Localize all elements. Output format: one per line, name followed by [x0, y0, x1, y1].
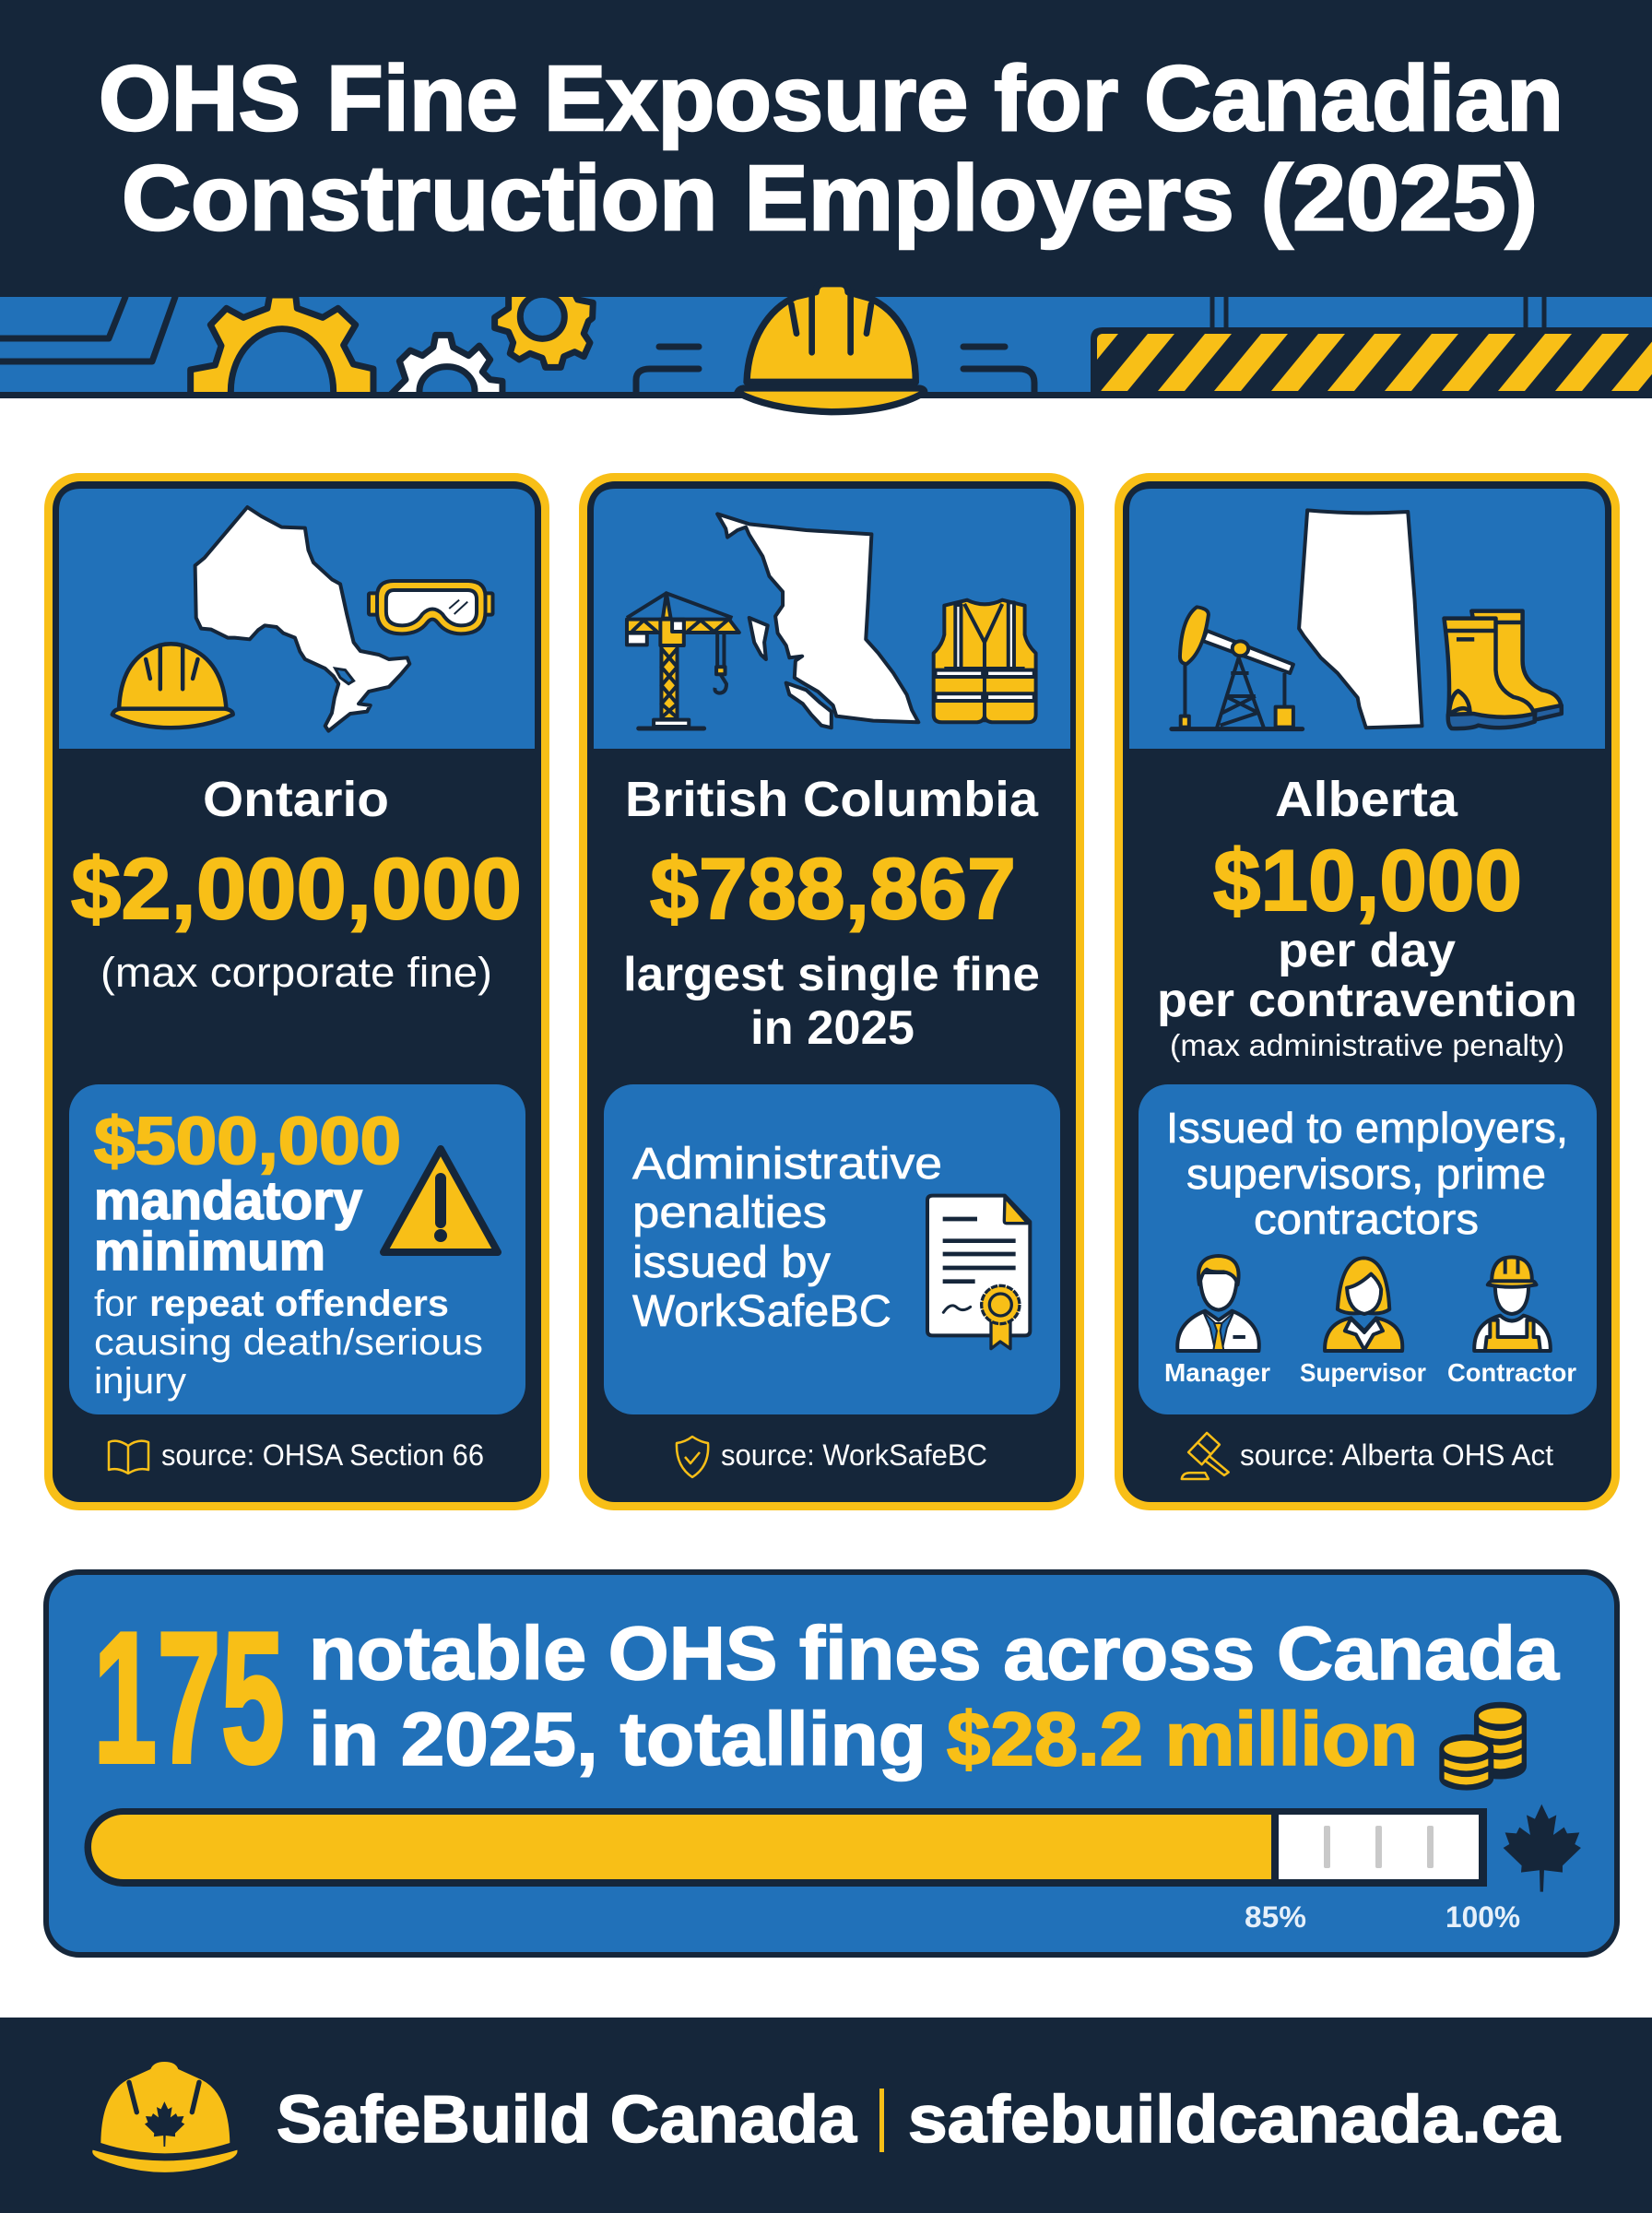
icon: safety vest	[934, 600, 1036, 722]
bar labels	[1245, 1900, 1520, 1934]
callout: who receives penalties: Issued to employers,	[1166, 1104, 1568, 1152]
source: WorkSafeBC	[677, 1437, 987, 1477]
stat caption	[623, 948, 1040, 1055]
source: OHSA: source: OHSA Section 66	[161, 1438, 484, 1472]
icon: safety goggles	[369, 581, 492, 633]
icon: work boots	[1445, 611, 1562, 728]
icon: warning triangle	[384, 1149, 498, 1252]
callout: mandatory minimum	[69, 1084, 525, 1414]
callout: administrative penalties: issued by	[632, 1238, 831, 1287]
icon: manager	[1177, 1256, 1259, 1351]
panel: Ontario	[44, 473, 549, 1510]
hazard stripe block	[1091, 327, 1652, 392]
stat caption: largest single fine	[623, 948, 1040, 1001]
callout: mandatory minimum: mandatory	[94, 1171, 362, 1231]
callout: mandatory minimum: $500,000	[94, 1105, 401, 1178]
footer	[0, 2018, 1652, 2213]
stat caption: per day	[1278, 924, 1456, 977]
role labels: Supervisor	[1300, 1358, 1426, 1387]
title	[99, 47, 1564, 250]
icon: British Columbia map	[717, 514, 918, 728]
heading: British Columbia: British Columbia	[625, 772, 1039, 827]
role labels: Manager	[1164, 1358, 1270, 1387]
icon: large hard hat	[738, 284, 925, 412]
callout: mandatory minimum: for	[94, 1284, 137, 1324]
callout: who receives penalties: contractors	[1254, 1195, 1479, 1243]
callout: mandatory minimum: minimum	[94, 1222, 325, 1282]
callout: administrative penalties: WorkSafeBC	[632, 1287, 891, 1336]
stat: per day penalty: $10,000	[1213, 832, 1522, 929]
icon: Alberta map	[1299, 510, 1422, 728]
icon: coins	[1441, 1704, 1525, 1789]
source: Alberta OHS Act	[1182, 1433, 1553, 1479]
stat caption: (max administrative penalty)	[1170, 1028, 1564, 1062]
circuit lines	[0, 297, 1544, 392]
stat: largest single fine: $788,867	[650, 840, 1016, 937]
panel: national total	[46, 1572, 1617, 1955]
source: WorkSafeBC: source: WorkSafeBC	[721, 1438, 987, 1472]
bar labels: 85%	[1245, 1900, 1306, 1934]
icon: Ontario map	[195, 507, 409, 731]
title: Construction Employers (2025)	[122, 147, 1538, 250]
callout: mandatory minimum: repeat offenders	[149, 1284, 449, 1324]
icon: maple leaf	[1504, 1805, 1581, 1892]
callout: administrative penalties: penalties	[632, 1189, 827, 1237]
headline: notable fines	[309, 1612, 1560, 1781]
panel: Alberta	[1115, 473, 1620, 1510]
icon: certificate document	[927, 1196, 1030, 1349]
website: safebuildcanada.ca	[908, 2083, 1561, 2157]
icon: pump jack	[1172, 607, 1303, 729]
stat caption	[1157, 924, 1577, 1062]
header banner	[0, 0, 1652, 297]
callout: who receives penalties	[1139, 1084, 1597, 1414]
stat: max corporate fine: $2,000,000	[71, 840, 522, 937]
stat: 175: 175	[93, 1593, 285, 1803]
stat caption: in 2025	[750, 1001, 914, 1055]
callout: administrative penalties	[604, 1084, 1060, 1414]
headline: notable fines: in 2025, totalling	[309, 1698, 926, 1781]
callout: mandatory minimum: injury	[94, 1361, 186, 1402]
icon: hard hat logo	[92, 2062, 237, 2172]
bar labels: 100%	[1446, 1900, 1520, 1934]
heading: Alberta: Alberta	[1275, 772, 1458, 827]
title: OHS Fine Exposure for Canadian	[99, 47, 1564, 150]
progress bar	[85, 1808, 1487, 1887]
icon: supervisor	[1325, 1258, 1402, 1351]
brand name: SafeBuild Canada	[277, 2083, 857, 2157]
callout: mandatory minimum: causing death/serious	[94, 1322, 483, 1363]
decorative construction band	[0, 284, 1652, 412]
icon: contractor	[1474, 1257, 1551, 1351]
panel: British Columbia	[579, 473, 1084, 1510]
divider	[879, 2089, 884, 2152]
source: Alberta OHS Act: source: Alberta OHS Act	[1240, 1438, 1553, 1472]
headline: notable fines: notable OHS fines across Canada	[309, 1612, 1560, 1696]
callout: who receives penalties: supervisors, prime	[1186, 1150, 1546, 1198]
heading: Ontario: Ontario	[203, 772, 389, 827]
role labels: Contractor	[1447, 1358, 1576, 1387]
callout: administrative penalties: Administrative	[632, 1140, 942, 1189]
icon: tower crane	[627, 593, 739, 728]
role labels	[1164, 1358, 1576, 1387]
icon: hard hat	[112, 644, 233, 728]
stat caption: per contravention	[1157, 974, 1577, 1027]
headline: notable fines: $28.2 million	[947, 1698, 1418, 1781]
icon: gears	[191, 293, 593, 396]
stat caption: (max corporate fine)	[100, 949, 492, 996]
